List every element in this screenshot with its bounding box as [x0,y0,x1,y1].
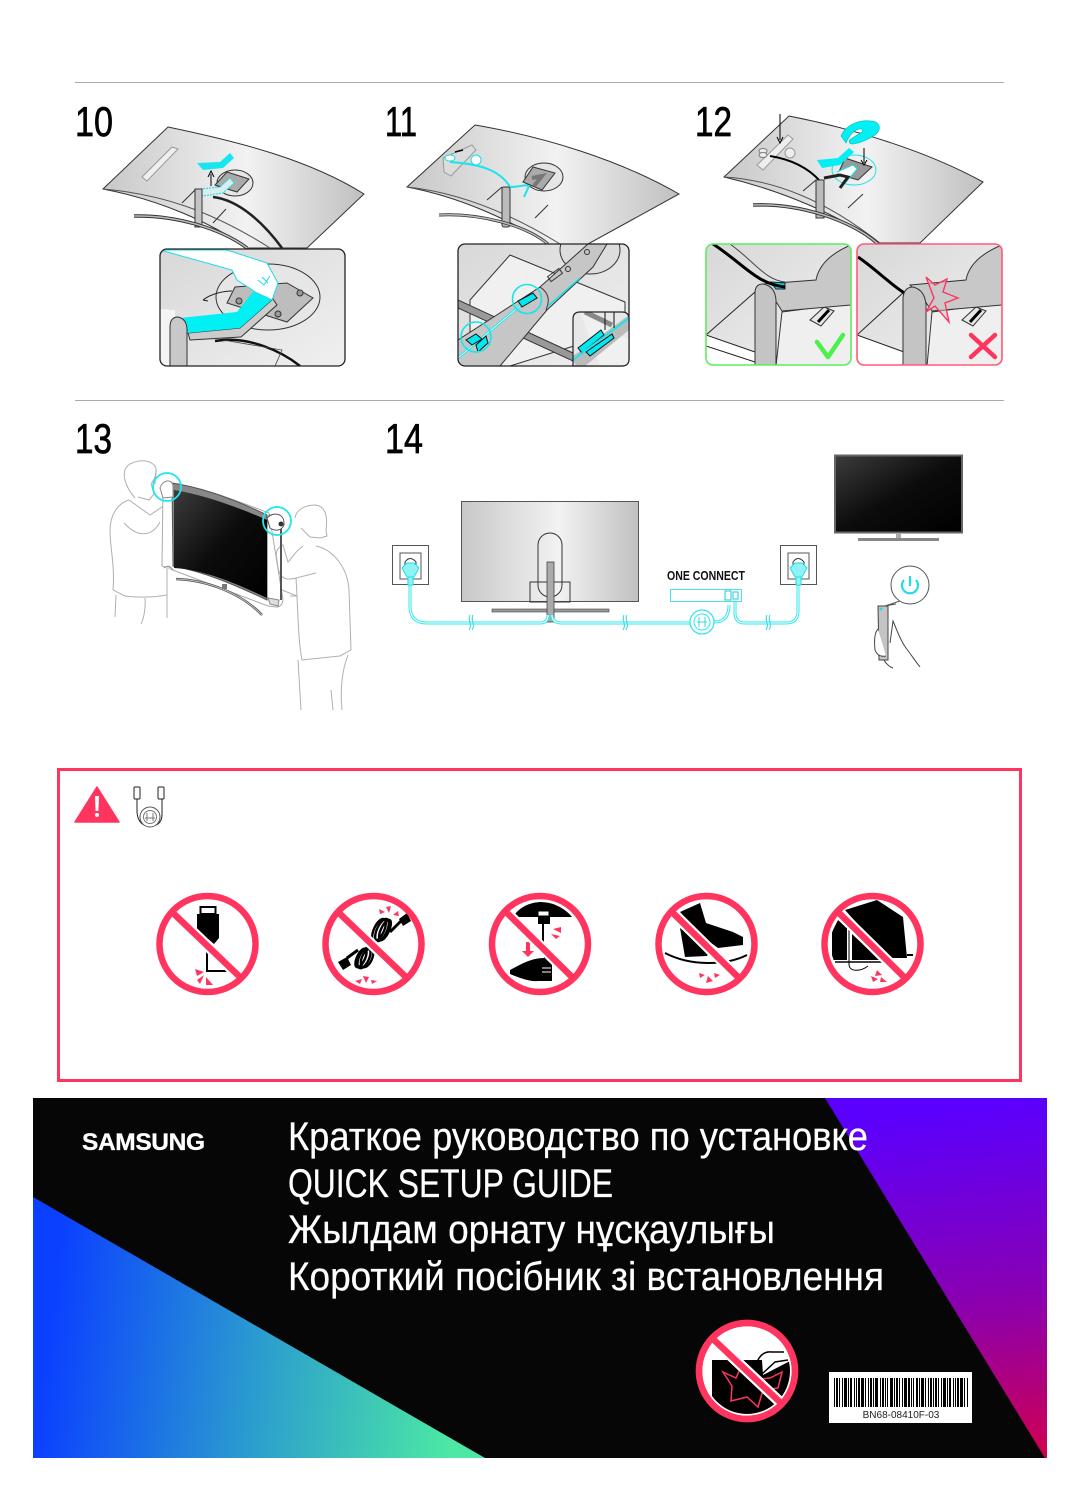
inset: cable clips on stand [458,244,628,366]
step number 14: 14 [385,415,423,462]
title block [288,1115,884,1299]
panel: step 12 [695,98,1002,366]
right wall socket [780,546,816,585]
right person [276,505,351,710]
title block: Короткий посібник зі встановлення [288,1255,884,1299]
remote in hand [875,606,920,668]
inset frame red [857,244,1002,365]
title block: QUICK SETUP GUIDE [288,1162,613,1206]
small inset: clip closure [573,312,629,366]
icon: do not bend the plug [160,896,256,992]
purple gradient triangle [825,1098,1047,1458]
title block: Жылдам орнату нұсқаулығы [288,1208,775,1252]
icon: do not pull the cable [492,896,588,992]
inset frame green [706,244,851,365]
illustration: TV back with routed cable [407,125,679,244]
inset: correct cable routing [706,244,851,366]
inset: removing the stand cover [160,249,346,366]
cross mark [971,335,995,357]
icon: warning triangle [75,787,119,822]
One Connect box [667,569,745,602]
hand markers [153,473,291,535]
icon: do not coil the cable [326,896,422,992]
panel: step 10 [75,98,364,366]
step number 11: 11 [385,98,417,145]
TV back [462,502,638,622]
illustration: TV back with stand cover [103,127,364,248]
blue gradient triangle [33,1197,485,1458]
inset frame 10 [160,249,345,366]
logo: Samsung: SAMSUNG [82,1129,205,1156]
panel: cover banner [33,1098,1047,1458]
small inset frame [573,312,629,366]
step number 13: 13 [75,415,112,462]
barcode label: BN68-08410F-03 [863,1410,940,1421]
icon: do not trap the cable [824,896,920,992]
step number 12: 12 [695,98,732,145]
inset frame 11 [458,244,629,366]
icon: do not step on the cable [658,896,754,992]
TV front [835,456,962,541]
title block: Краткое руководство по установке [288,1115,868,1159]
panel: step 14 [385,415,962,668]
left person [110,461,167,624]
curved TV front [162,483,283,615]
panel: step 11 [385,98,679,366]
panel: step 13 [75,415,351,710]
left wall socket [392,546,428,585]
inset: incorrect cable routing [857,244,1002,366]
barcode label [829,1372,972,1423]
power bubble [885,566,929,606]
panel: warning box [58,770,1020,1080]
step number 10: 10 [75,98,113,145]
cables [410,585,798,634]
One Connect box: ONE CONNECT [667,569,745,583]
icon: One Connect cable [134,787,164,827]
check mark [817,335,843,357]
icon: do not touch the screen [699,1323,795,1420]
illustration: TV back with covers being attached [724,114,983,243]
